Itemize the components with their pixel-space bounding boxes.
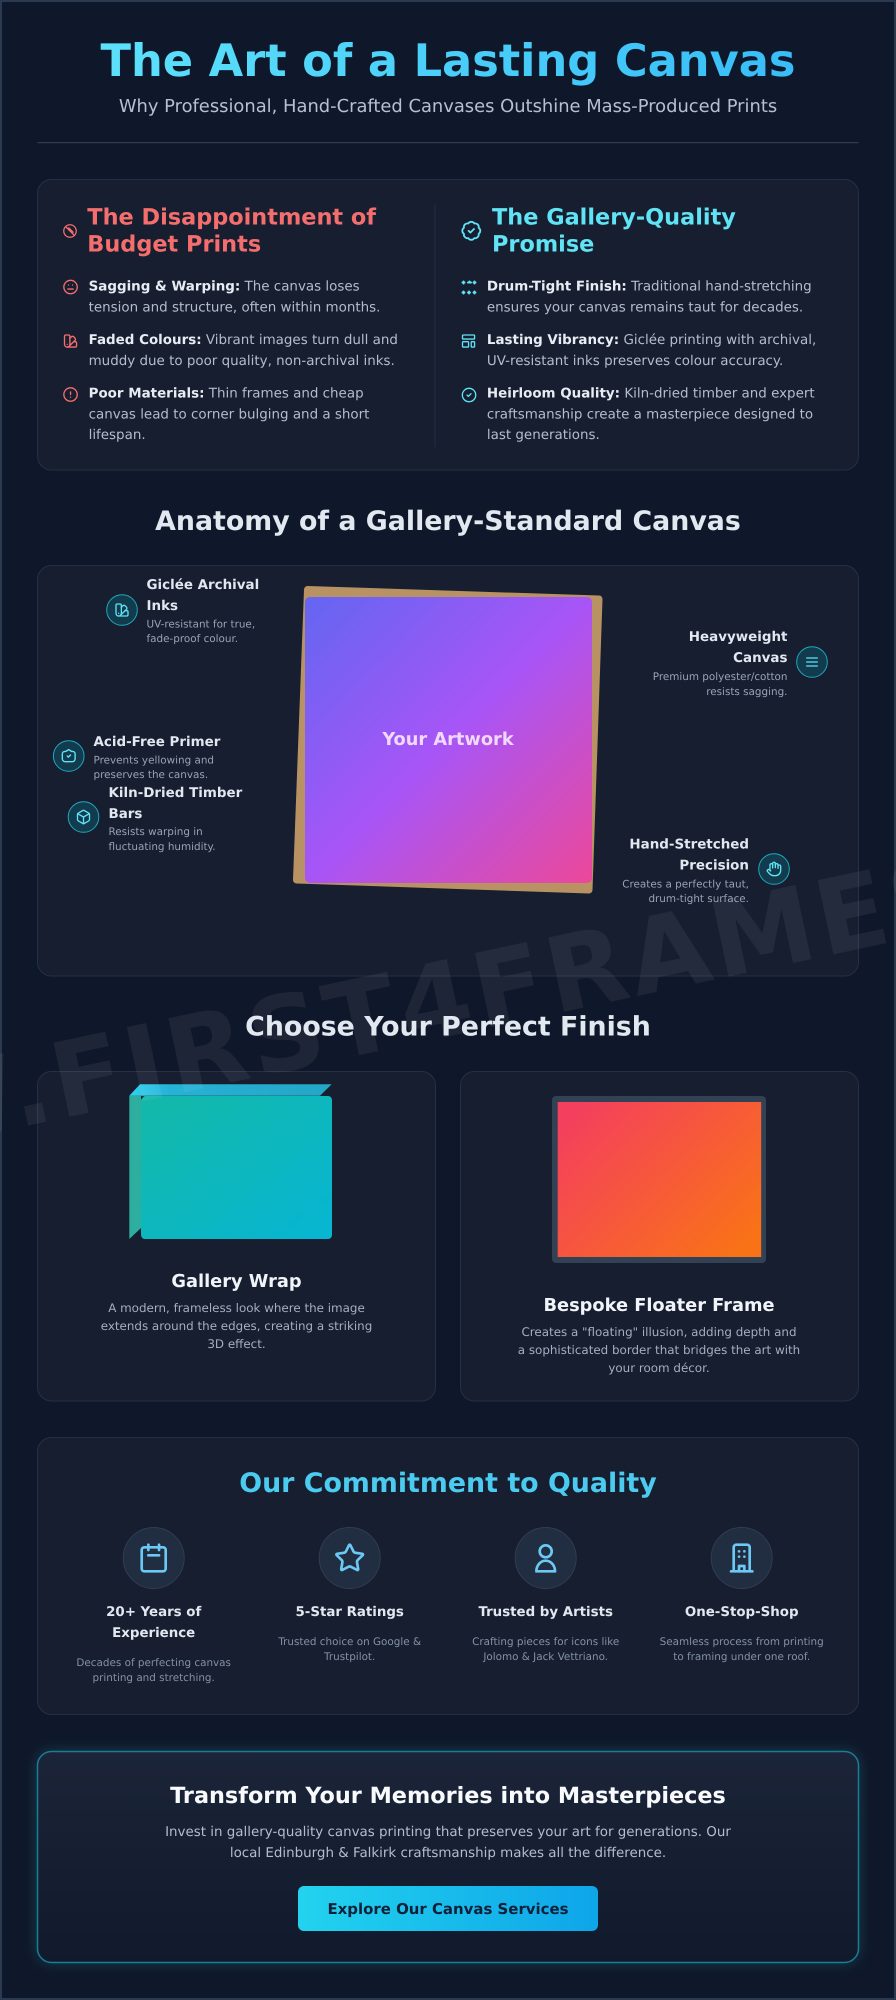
callout: heavyweight canvas: [653, 630, 827, 698]
callout: heavyweight canvas: resists sagging.: [706, 686, 788, 698]
callout: kiln-dried timber: fluctuating humidity.: [108, 841, 216, 853]
stat: 5-star ratings: Trustpilot.: [323, 1651, 375, 1663]
artwork label: Your Artwork: [381, 729, 515, 750]
callout: heavyweight canvas: Premium polyester/cotton: [653, 671, 788, 683]
column: gallery promise: [462, 204, 816, 443]
item: drum-tight: ensures your canvas remains taut for decades.: [487, 300, 803, 315]
item: sagging: [64, 280, 380, 315]
heading: anatomy: Anatomy of a Gallery-Standard Canvas: [155, 506, 741, 537]
card: gallery wrap: [38, 1072, 436, 1401]
item: sagging: The canvas loses: [240, 280, 360, 294]
item: lasting vibrancy: Lasting Vibrancy:: [487, 333, 619, 348]
illustration: floater frame: [552, 1096, 766, 1263]
callout: hand-stretched precision: [622, 838, 789, 905]
stat: trusted by artists: Jolomo & Jack Vettriano.: [482, 1651, 608, 1663]
stat: one-stop-shop: One-Stop-Shop: [685, 1605, 799, 1620]
cta text: Invest in gallery-quality canvas printing that preserves your art for generations. Our: [165, 1825, 731, 1840]
callout: acid-free primer: [53, 735, 221, 781]
card description: Creates a "floating" illusion, adding depth and: [522, 1325, 796, 1339]
item: poor materials: [64, 387, 369, 443]
callout: kiln-dried timber: Bars: [108, 807, 142, 822]
item: heirloom quality: Heirloom Quality:: [487, 387, 620, 402]
item: poor materials: canvas lead to corner bulging and a short: [89, 407, 369, 422]
heading: budget prints: Budget Prints: [87, 232, 261, 258]
stat: years of experience: printing and stretching.: [93, 1672, 215, 1684]
wooden stretcher frame: [296, 590, 599, 890]
item: faded colours: [65, 333, 398, 369]
callout: hand-stretched precision: Creates a perfectly taut,: [622, 878, 749, 890]
stat: 5-star ratings: Trusted choice on Google &: [277, 1636, 421, 1648]
callout: heavyweight canvas: Heavyweight: [689, 630, 788, 645]
panel: anatomy diagram: [38, 566, 858, 976]
artwork surface: [305, 597, 592, 883]
item: faded colours: Vibrant images turn dull and: [202, 333, 398, 348]
item: drum-tight: Traditional hand-stretching: [627, 280, 812, 294]
stat: one-stop-shop: [660, 1528, 824, 1663]
heading: gallery promise: Promise: [492, 232, 594, 258]
stat: trusted by artists: Crafting pieces for icons like: [472, 1636, 619, 1648]
icon: badge check: [462, 222, 480, 240]
stat: years of experience: Experience: [112, 1626, 195, 1641]
item: sagging: tension and structure, often within months.: [89, 300, 380, 315]
card: floater frame: [460, 1072, 858, 1401]
callout: acid-free primer: Prevents yellowing and: [94, 754, 214, 766]
illustration: gallery wrap: [129, 1084, 332, 1239]
card description: 3D effect.: [207, 1337, 266, 1351]
panel: call to action: [38, 1752, 858, 1962]
item: lasting vibrancy: UV-resistant inks preserves colour accuracy.: [487, 354, 783, 369]
item: faded colours: muddy due to poor quality, non-archival inks.: [89, 354, 395, 369]
item: heirloom quality: [462, 387, 815, 443]
item: drum-tight: Drum-Tight Finish:: [487, 280, 627, 294]
title: The Art of a Lasting Canvas: [100, 35, 796, 87]
callout: giclee inks: fade-proof colour.: [146, 633, 238, 645]
stat: years of experience: 20+ Years of: [106, 1605, 201, 1620]
callout: hand-stretched precision: Precision: [679, 858, 749, 874]
cta text: local Edinburgh & Falkirk craftsmanship makes all the difference.: [230, 1846, 666, 1861]
callout: giclee inks: [107, 578, 259, 645]
icon: ban: [64, 225, 76, 237]
card title: Gallery Wrap: [171, 1271, 302, 1292]
item: poor materials: lifespan.: [89, 428, 146, 443]
callout: giclee inks: Giclée Archival: [146, 578, 259, 593]
callout: kiln-dried timber: Kiln-Dried Timber: [108, 786, 243, 801]
cta button: [298, 1886, 598, 1931]
heading: finish: Choose Your Perfect Finish: [245, 1012, 651, 1043]
item: sagging: Sagging & Warping:: [89, 280, 240, 294]
stat: years of experience: Decades of perfecting canvas: [76, 1657, 231, 1669]
item: drum-tight: [462, 280, 812, 315]
stat: one-stop-shop: to framing under one roof.: [673, 1651, 810, 1663]
item: faded colours: Faded Colours:: [89, 333, 202, 348]
stat: one-stop-shop: Seamless process from printing: [660, 1636, 824, 1648]
stat: years of experience: [76, 1528, 231, 1684]
stat: trusted by artists: Trusted by Artists: [478, 1605, 613, 1620]
stat: trusted by artists: [472, 1528, 619, 1663]
item: heirloom quality: Kiln-dried timber and expert: [620, 387, 815, 402]
callout: kiln-dried timber: Resists warping in: [108, 826, 203, 838]
card description: a sophisticated border that bridges the art with: [518, 1343, 800, 1357]
item: poor materials: Thin frames and cheap: [204, 387, 364, 402]
panel: commitment to quality: [38, 1438, 858, 1714]
heading: commitment: Our Commitment to Quality: [239, 1468, 657, 1499]
callout: heavyweight canvas: Canvas: [733, 651, 788, 666]
stat: 5-star ratings: [277, 1528, 421, 1663]
subtitle: Why Professional, Hand-Crafted Canvases Outshine Mass-Produced Prints: [119, 96, 777, 117]
heading: gallery promise: The Gallery-Quality: [492, 204, 736, 230]
callout: giclee inks: UV-resistant for true,: [146, 618, 255, 630]
header: [38, 35, 858, 143]
card description: extends around the edges, creating a striking: [101, 1319, 372, 1333]
card title: Bespoke Floater Frame: [543, 1295, 775, 1316]
canvas illustration: [296, 590, 599, 890]
item: heirloom quality: last generations.: [487, 428, 600, 443]
item: lasting vibrancy: Giclée printing with archival,: [619, 333, 816, 348]
panel: comparison: [38, 180, 858, 470]
stat: 5-star ratings: 5-Star Ratings: [295, 1605, 404, 1620]
item: poor materials: Poor Materials:: [89, 387, 204, 402]
callout: giclee inks: Inks: [146, 599, 178, 614]
callout: acid-free primer: Acid-Free Primer: [94, 735, 221, 750]
item: heirloom quality: craftsmanship create a masterpiece designed to: [487, 407, 813, 422]
callout: kiln-dried timber: [68, 786, 243, 853]
cta button: Explore Our Canvas Services: [327, 1900, 569, 1918]
callout: hand-stretched precision: drum-tight surface.: [648, 893, 749, 905]
card description: A modern, frameless look where the image: [108, 1301, 365, 1315]
column: budget prints: [64, 204, 398, 443]
heading: budget prints: The Disappointment of: [87, 204, 376, 230]
card description: your room décor.: [608, 1361, 710, 1375]
callout: acid-free primer: preserves the canvas.: [94, 769, 208, 781]
item: lasting vibrancy: [463, 333, 816, 369]
cta heading: Transform Your Memories into Masterpieces: [170, 1783, 726, 1809]
callout: hand-stretched precision: Hand-Stretched: [629, 838, 749, 852]
